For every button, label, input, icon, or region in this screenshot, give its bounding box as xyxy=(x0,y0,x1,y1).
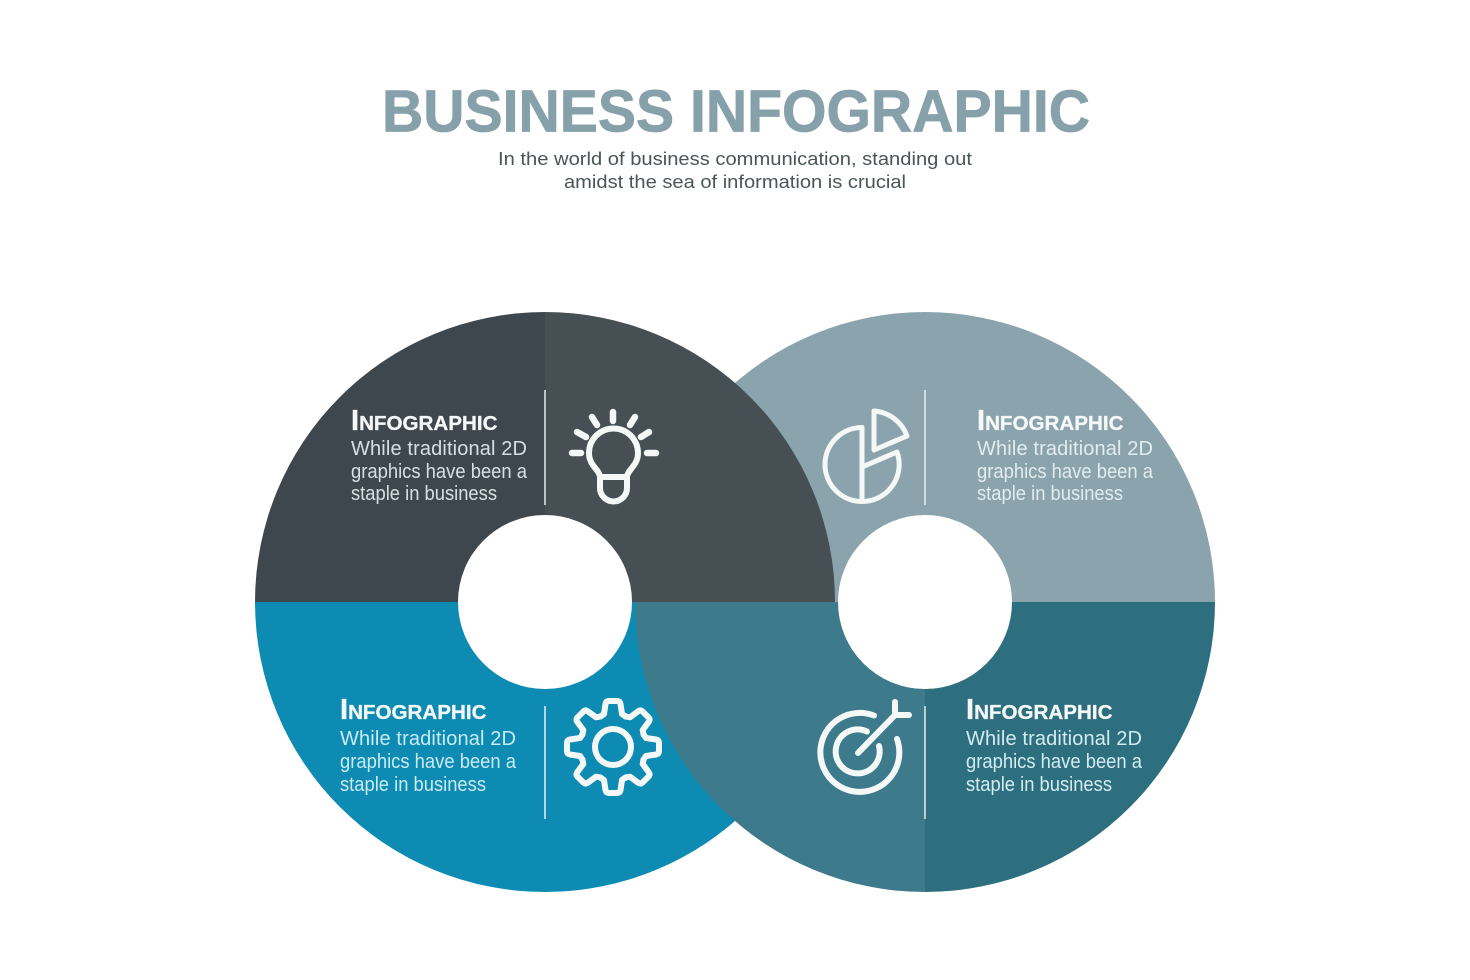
text block: top right: INFOGRAPHIC xyxy=(977,405,1124,437)
icon: target xyxy=(820,702,909,792)
text block: bottom right: INFOGRAPHIC xyxy=(966,694,1113,726)
text block: bottom right: While traditional 2D xyxy=(966,728,1142,750)
text block: top right xyxy=(977,405,1154,505)
panel: top right segment xyxy=(635,312,1215,602)
subtitle: In the world of business communication, standing out xyxy=(498,149,972,169)
text block: top right: staple in business xyxy=(977,483,1123,505)
text block: bottom left: staple in business xyxy=(340,774,486,796)
panel: bottom right segment xyxy=(635,602,1215,892)
text block: top left: While traditional 2D xyxy=(351,438,527,460)
text block: bottom left: graphics have been a xyxy=(340,751,517,773)
title: BUSINESS INFOGRAPHIC xyxy=(382,78,1090,144)
subtitle: amidst the sea of information is crucial xyxy=(564,172,906,192)
icon: light bulb xyxy=(572,412,656,502)
text block: top right: While traditional 2D xyxy=(977,438,1153,460)
text block: top left xyxy=(351,405,528,505)
icon: pie chart xyxy=(825,411,907,502)
text block: bottom left xyxy=(340,694,517,796)
text block: top right: graphics have been a xyxy=(977,461,1154,483)
text block: top left: staple in business xyxy=(351,483,497,505)
icon: gear xyxy=(567,701,659,793)
text block: top left: graphics have been a xyxy=(351,461,528,483)
text block: bottom left: INFOGRAPHIC xyxy=(340,694,487,726)
text block: top left: INFOGRAPHIC xyxy=(351,405,498,437)
text block: bottom right: graphics have been a xyxy=(966,751,1143,773)
panel: bottom left segment xyxy=(255,602,835,892)
text block: bottom left: While traditional 2D xyxy=(340,728,516,750)
text block: bottom right xyxy=(966,694,1143,796)
text block: bottom right: staple in business xyxy=(966,774,1112,796)
panel: top left segment xyxy=(255,312,835,602)
subtitle xyxy=(498,149,972,192)
